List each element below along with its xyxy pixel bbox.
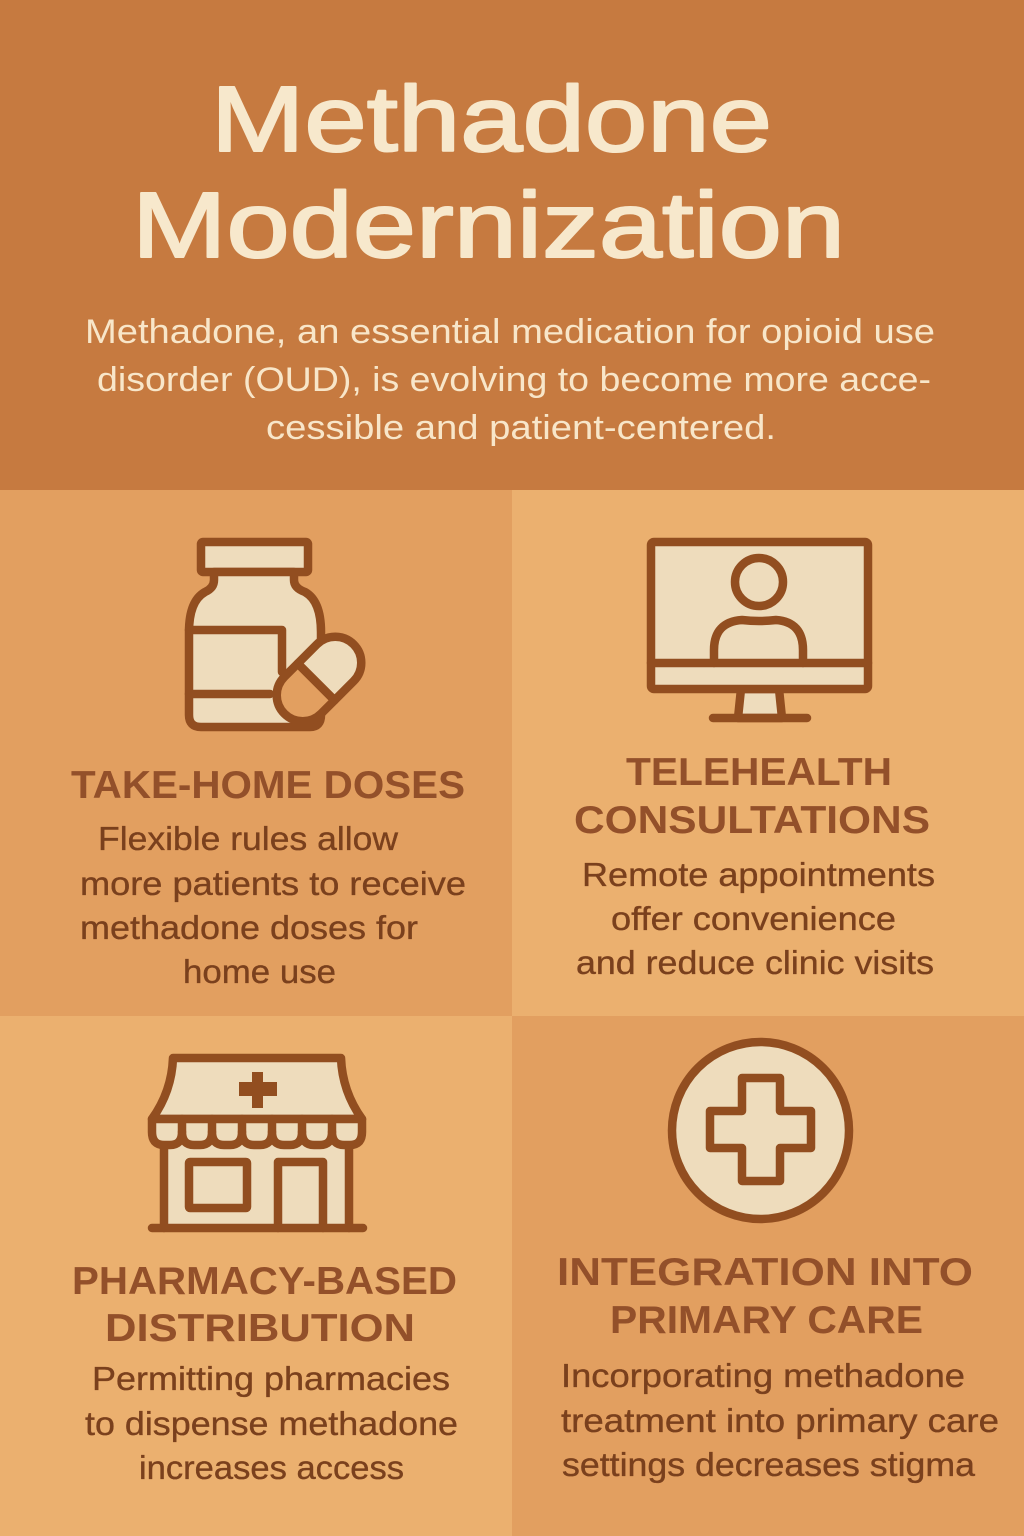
description <box>561 1357 999 1483</box>
intro text: disorder (OUD), is evolving to become more acce- <box>97 361 931 399</box>
heading: TELEHEALTH <box>626 751 892 794</box>
panel: pharmacy-based distribution <box>0 1016 512 1536</box>
description: increases access <box>139 1449 404 1486</box>
panel background <box>512 490 1024 1016</box>
heading: INTEGRATION INTO <box>557 1251 973 1294</box>
panel: header <box>0 0 1024 490</box>
panel background <box>0 1016 512 1536</box>
description: treatment into primary care <box>561 1402 999 1439</box>
intro text: cessible and patient-centered. <box>266 409 776 447</box>
panel: take-home doses <box>0 490 512 1016</box>
title: Methadone <box>211 67 772 171</box>
description: Permitting pharmacies <box>92 1360 450 1397</box>
panel: telehealth consultations <box>512 490 1024 1016</box>
panel background <box>512 1016 1024 1536</box>
description <box>80 820 466 990</box>
description: methadone doses for <box>80 909 418 946</box>
icon: computer monitor with person <box>651 542 868 718</box>
header background <box>0 0 1024 490</box>
panel: integration into primary care <box>512 1016 1024 1536</box>
heading <box>574 751 930 842</box>
heading <box>557 1251 973 1342</box>
description: Flexible rules allow <box>98 820 398 857</box>
icon: pharmacy storefront <box>152 1058 363 1228</box>
description: home use <box>183 953 336 990</box>
description <box>85 1360 458 1486</box>
description: more patients to receive <box>80 865 466 902</box>
icon: medical cross in circle <box>672 1042 849 1219</box>
title: Modernization <box>132 173 845 277</box>
description: offer convenience <box>611 900 896 937</box>
description: Incorporating methadone <box>561 1357 965 1394</box>
heading: PRIMARY CARE <box>610 1299 923 1342</box>
heading: PHARMACY-BASED <box>72 1260 457 1303</box>
title <box>132 67 845 277</box>
description: and reduce clinic visits <box>576 944 934 981</box>
heading: CONSULTATIONS <box>574 799 930 842</box>
description <box>576 856 935 981</box>
description: to dispense methadone <box>85 1405 458 1442</box>
heading <box>72 1260 457 1350</box>
heading: TAKE-HOME DOSES <box>71 764 465 807</box>
description: settings decreases stigma <box>562 1446 976 1483</box>
description: Remote appointments <box>582 856 935 893</box>
heading: DISTRIBUTION <box>105 1307 415 1350</box>
intro text <box>85 313 935 447</box>
panel background <box>0 490 512 1016</box>
icon: medicine bottle and capsule <box>189 542 372 732</box>
intro text: Methadone, an essential medication for opioid use <box>85 313 935 351</box>
